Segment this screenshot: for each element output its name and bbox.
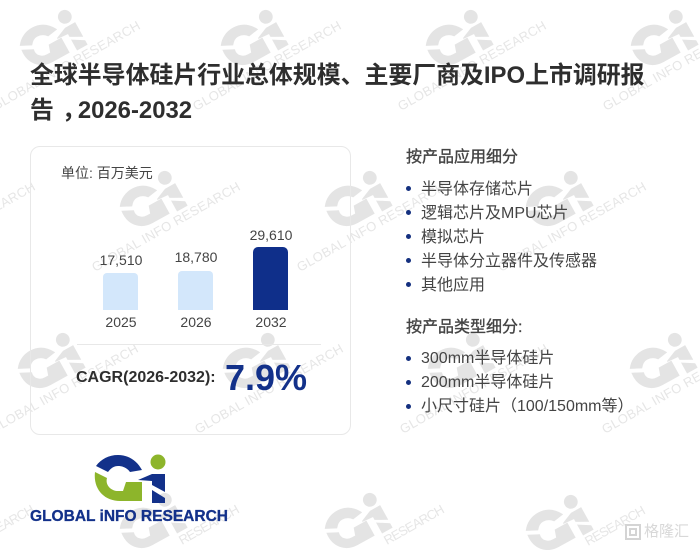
G lower [95,472,142,501]
bullet [406,404,411,409]
bar chart [100,227,292,330]
icon [625,524,641,540]
item: 小尺寸硅片（100/150mm等） [421,398,634,415]
list: types [406,349,634,415]
background watermark: GLOBAL INFO RESEARCH [294,179,448,275]
background watermark: GLOBAL INFO RESEARCH [397,341,551,437]
wordmark: GLOBAL iNFO RESEARCH [30,508,228,525]
bar 2025 [103,273,138,310]
i stem [138,474,165,503]
year 2032: 2032 [255,314,287,330]
value 2026: 18,780 [175,249,217,265]
background watermark: GLOBAL INFO RESEARCH [190,18,344,114]
title: 全球半导体硅片行业总体规模、主要厂商及IPO上市调研报告 ，2026-2032 [30,62,645,124]
logo: Global Info Research [30,454,228,525]
value 2032: 29,610 [250,227,292,243]
item: 200mm半导体硅片 [421,374,554,391]
divider [77,344,321,345]
bullet [406,234,411,239]
bar 2032 [253,247,288,310]
bullet [406,210,411,215]
background watermark: GLOBAL INFO RESEARCH [395,18,549,114]
panel: market size [30,146,351,435]
bullet [406,282,411,287]
year 2025: 2025 [105,314,137,330]
background watermark: RESEARCH [381,502,447,548]
background watermark: RESEARCH [582,503,648,549]
CAGR label: CAGR(2026-2032): [76,369,216,386]
bullet [406,258,411,263]
item: 模拟芯片 [421,229,485,246]
item: 300mm半导体硅片 [421,350,554,367]
source text: 格隆汇 [644,523,689,540]
bar 2026 [178,271,213,310]
list: applications [406,180,597,294]
i dot [150,454,166,470]
CAGR value: 7.9% [225,357,307,398]
bullet [406,356,411,361]
background watermark: GLOBAL INFO RESEARCH [495,179,649,275]
value 2025: 17,510 [100,252,142,268]
G upper arc [96,455,142,472]
background watermark: RESEARCH [176,502,242,548]
background watermark: GLOBAL INFO RESEARCH [192,341,346,437]
year 2026: 2026 [180,314,212,330]
item: 其他应用 [421,277,485,294]
unit label: 单位: 百万美元 [61,165,153,181]
item: 逻辑芯片及MPU芯片 [421,205,569,222]
heading: by type: 按产品类型细分: [406,319,522,336]
item: 半导体存储芯片 [421,181,533,198]
bullet [406,380,411,385]
item: 半导体分立器件及传感器 [421,253,597,270]
background watermark: GLOBAL INFO RESEARCH [89,179,243,275]
heading: by application: 按产品应用细分 [406,149,518,166]
bullet [406,186,411,191]
source watermark [625,523,689,540]
